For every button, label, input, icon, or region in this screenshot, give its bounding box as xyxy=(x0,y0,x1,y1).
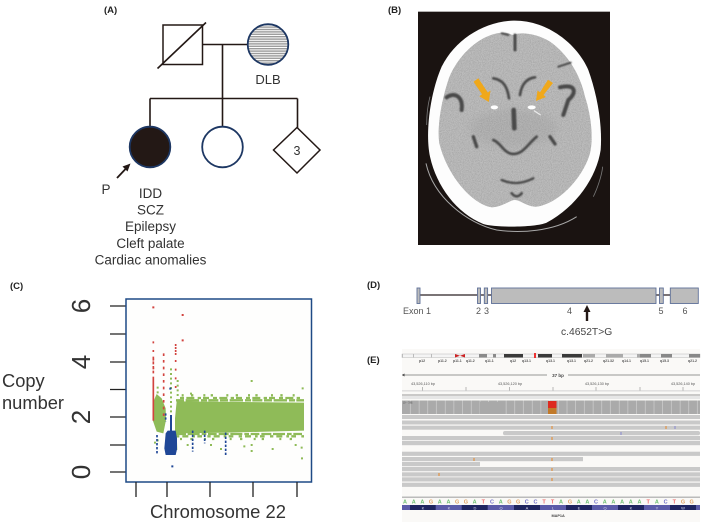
reference sequence: G xyxy=(455,500,459,506)
reference sequence: G xyxy=(464,500,468,506)
y-axis ticks and numbers: 4 xyxy=(66,355,96,369)
reference sequence: A xyxy=(655,500,659,506)
pedigree connecting lines xyxy=(150,44,298,128)
reference sequence: T xyxy=(647,500,651,506)
panel: C copy number plot xyxy=(2,281,312,522)
reference sequence: G xyxy=(429,500,433,506)
scale line with 37 bp: 37 bp xyxy=(552,373,564,378)
reference sequence: A xyxy=(420,500,424,506)
deceased father symbol xyxy=(158,22,206,68)
protein translation bar: K xyxy=(630,505,633,510)
panel: D gene structure xyxy=(367,280,698,338)
reference sequence: A xyxy=(638,500,642,506)
protein translation bar xyxy=(402,505,700,510)
reference sequence: A xyxy=(577,500,581,506)
reference sequence: A xyxy=(629,500,633,506)
genomic ruler: 43,526,120 bp xyxy=(498,382,522,386)
reference sequence: C xyxy=(594,500,598,506)
y-axis title xyxy=(2,370,64,413)
label D: (D) xyxy=(367,280,380,291)
chromosome ideogram: q13.1 xyxy=(522,359,531,363)
reference sequence: A xyxy=(499,500,503,506)
chromosome ideogram: q21.32 xyxy=(603,359,614,363)
y-axis ticks and numbers xyxy=(66,299,126,479)
chromosome ideogram: p11.2 xyxy=(438,359,447,363)
protein translation bar: K xyxy=(448,505,451,510)
exon labels: Exon 1 xyxy=(403,306,431,316)
protein translation bar: L xyxy=(552,505,555,510)
reference sequence: A xyxy=(412,500,416,506)
variant label: c.4652T>G xyxy=(561,327,612,338)
protein translation bar: A xyxy=(526,505,529,510)
reference sequence: C xyxy=(490,500,494,506)
chromosome ideogram: q15.1 xyxy=(640,359,649,363)
reference sequence: A xyxy=(438,500,442,506)
exon labels: 6 xyxy=(682,306,688,316)
label DLB: DLB xyxy=(255,72,281,87)
proband phenotype list: Cardiac anomalies xyxy=(95,252,207,268)
sequencing read rows xyxy=(402,415,700,487)
reference sequence: A xyxy=(620,500,624,506)
exon labels: 3 xyxy=(484,306,489,316)
reference sequence: T xyxy=(482,500,486,506)
chromosome ideogram: p11.1 xyxy=(453,359,462,363)
chromosome ideogram: q11.1 xyxy=(485,359,494,363)
reference sequence: G xyxy=(507,500,512,506)
label B: (B) xyxy=(388,5,401,16)
reference sequence: G xyxy=(681,500,685,506)
label E: (E) xyxy=(367,355,380,366)
chromosome ideogram: q21.2 xyxy=(688,359,697,363)
genomic ruler: 43,526,140 bp xyxy=(671,382,695,386)
reference sequence: A xyxy=(603,500,607,506)
left orange arrow xyxy=(474,78,490,102)
proband phenotype list: SCZ xyxy=(137,202,164,218)
panel: B brain CT xyxy=(388,5,610,245)
reference sequence: G xyxy=(568,500,572,506)
reference sequence: T xyxy=(551,500,555,506)
proband phenotype list: Cleft palate xyxy=(116,236,185,251)
y-axis title: Copy xyxy=(2,370,46,391)
right orange arrow xyxy=(536,80,553,101)
CT scan image xyxy=(418,12,610,245)
coverage track: [0 - 38] xyxy=(403,400,413,404)
y-axis ticks and numbers: 0 xyxy=(66,465,96,479)
reference sequence: G xyxy=(690,500,694,506)
genomic ruler: 43,526,130 bp xyxy=(585,382,609,386)
exons xyxy=(417,288,698,304)
reference sequence: A xyxy=(585,500,589,506)
diamond siblings symbol xyxy=(274,128,320,173)
x-axis ticks xyxy=(136,482,297,497)
chromosome ideogram: q13.1 xyxy=(567,359,576,363)
x-axis title: Chromosome 22 xyxy=(150,501,286,522)
gene intron line xyxy=(420,294,698,296)
y-axis ticks and numbers: 2 xyxy=(66,410,96,424)
label P: P xyxy=(102,182,111,197)
proband phenotype list: IDD xyxy=(139,186,162,201)
exon labels: 2 xyxy=(476,306,481,316)
gene name: MAP1A xyxy=(552,514,565,518)
reference sequence: A xyxy=(447,500,451,506)
protein translation bar: Q xyxy=(603,505,607,510)
protein translation bar: K xyxy=(422,505,425,510)
label A: (A) xyxy=(104,5,117,16)
plot frame xyxy=(126,299,312,482)
reference sequence: G xyxy=(516,500,520,506)
protein translation bar: Q xyxy=(499,505,503,510)
reference line xyxy=(402,496,700,498)
chromosome ideogram xyxy=(402,353,700,363)
variant arrow xyxy=(584,305,590,321)
mother symbol with hatching xyxy=(248,24,288,65)
chromosome ideogram: q21.2 xyxy=(584,359,593,363)
reference sequence: C xyxy=(534,500,538,506)
proband symbol xyxy=(130,127,170,167)
coverage track xyxy=(402,400,700,414)
proband phenotype list: Epilepsy xyxy=(125,219,176,234)
panel: A pedigree xyxy=(95,5,320,268)
chromosome ideogram: q15.3 xyxy=(660,359,669,363)
genomic ruler: 43,526,110 bp xyxy=(411,382,435,386)
y-axis title: number xyxy=(2,392,64,413)
chromosome ideogram: q12 xyxy=(510,359,516,363)
reference sequence: A xyxy=(559,500,563,506)
proband arrow xyxy=(117,164,130,178)
reference sequence: A xyxy=(403,500,407,506)
reference sequence: C xyxy=(525,500,529,506)
reference sequence: A xyxy=(473,500,477,506)
scatter points xyxy=(152,306,304,467)
genomic ruler xyxy=(402,382,700,399)
chromosome ideogram: q11.2 xyxy=(466,359,475,363)
protein translation bar: E xyxy=(578,505,581,510)
proband phenotype list xyxy=(95,186,207,268)
exon labels: 4 xyxy=(567,306,572,316)
y-axis ticks and numbers: 6 xyxy=(66,299,96,313)
chromosome ideogram: q14.1 xyxy=(622,359,631,363)
reference sequence: T xyxy=(673,500,677,506)
diamond siblings symbol: 3 xyxy=(294,144,301,158)
browser background xyxy=(402,349,700,522)
exon labels xyxy=(403,306,688,316)
reference sequence: A xyxy=(611,500,615,506)
label C: (C) xyxy=(10,281,23,292)
reference sequence: C xyxy=(664,500,668,506)
exon labels: 5 xyxy=(658,306,664,316)
protein translation bar: W xyxy=(681,505,685,510)
protein translation bar: D xyxy=(474,505,477,510)
sister symbol xyxy=(202,127,243,167)
protein translation bar: Y xyxy=(656,505,659,510)
chromosome ideogram: p12 xyxy=(419,359,425,363)
chromosome ideogram: q13.1 xyxy=(546,359,555,363)
panel: E genome browser xyxy=(367,349,700,522)
reference sequence: T xyxy=(542,500,546,506)
